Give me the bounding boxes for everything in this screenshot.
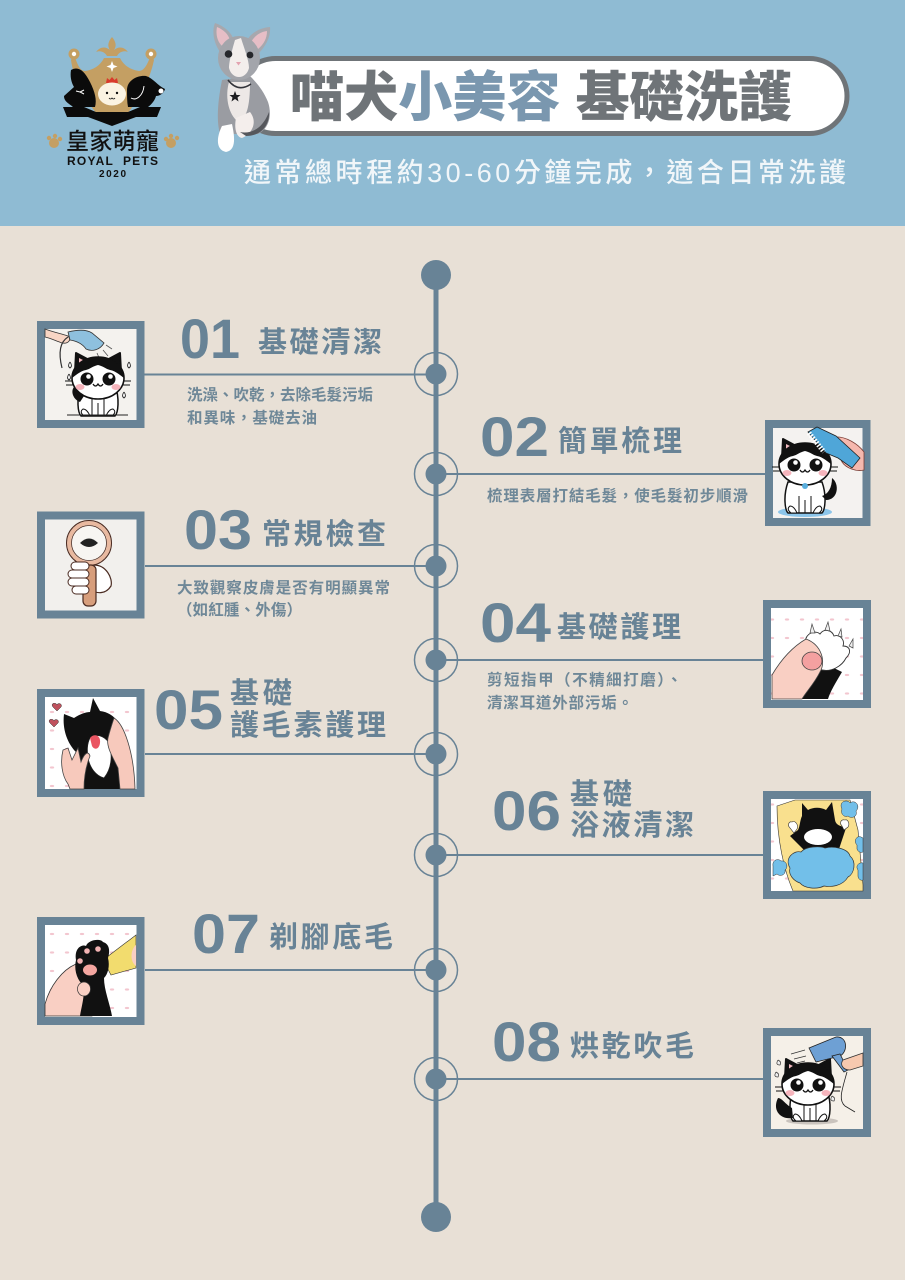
description 04 <box>487 670 682 712</box>
number 03: 03 <box>184 498 252 561</box>
heading 01: 基礎清潔 <box>258 326 382 359</box>
description 01: 洗澡、吹乾，去除毛髮污垢 <box>187 385 373 404</box>
icon: cat being showered <box>41 325 140 424</box>
heading 07: 剃腳底毛 <box>269 921 393 954</box>
connector 07 <box>145 969 436 971</box>
description 03: （如紅腫、外傷） <box>177 600 302 619</box>
number 02: 02 <box>480 405 549 468</box>
subtitle: 通常總時程約30-60分鐘完成，適合日常洗護 <box>244 158 846 188</box>
step 04 <box>414 591 867 712</box>
step 08 <box>414 1010 867 1133</box>
description 04: 清潔耳道外部污垢。 <box>487 693 633 712</box>
heading 04: 基礎護理 <box>557 611 681 644</box>
icon: paw with claws <box>767 604 867 704</box>
heading 03: 常規檢查 <box>262 518 386 551</box>
number 08: 08 <box>492 1010 561 1073</box>
number 06: 06 <box>492 779 561 842</box>
heading 05 <box>230 677 386 742</box>
icon: cat being blow dried <box>767 1032 867 1133</box>
description 03 <box>177 578 390 619</box>
node 06 <box>414 834 458 876</box>
node 07 <box>414 948 458 992</box>
heading 06 <box>570 778 694 842</box>
connector 06 <box>436 854 763 856</box>
heading 05: 護毛素護理 <box>230 709 386 742</box>
node 05 <box>414 732 458 776</box>
step 02 <box>414 405 866 522</box>
number 01: 01 <box>180 307 240 370</box>
number 05: 05 <box>154 678 223 741</box>
step 03 <box>41 498 458 619</box>
icon: cat in foam <box>767 795 867 895</box>
icon: paw pad trimming <box>41 921 140 1021</box>
icon: magnifying glass <box>41 516 140 614</box>
number 07: 07 <box>192 902 260 965</box>
number 04: 04 <box>480 591 551 654</box>
node 08 <box>414 1058 458 1100</box>
header band <box>0 0 905 226</box>
connector 02 <box>436 473 765 475</box>
step 07 <box>41 902 458 1021</box>
icon: cat being brushed <box>769 424 866 522</box>
step 05 <box>41 677 458 793</box>
kitten photo <box>213 23 270 152</box>
step 01 <box>41 307 458 427</box>
heading 02: 簡單梳理 <box>558 425 682 458</box>
logo: Royal Pets: 皇家萌寵 <box>66 128 159 154</box>
node 01 <box>414 352 458 396</box>
heading 05: 基礎 <box>230 677 292 710</box>
connector 08 <box>436 1078 763 1080</box>
description 01: 和異味，基礎去油 <box>187 408 317 427</box>
description 04: 剪短指甲（不精細打磨）、 <box>487 670 682 689</box>
node 04 <box>414 638 458 682</box>
description 02: 梳理表層打結毛髮，使毛髮初步順滑 <box>487 486 748 505</box>
connector 05 <box>145 753 436 755</box>
title: 喵犬小美容 基礎洗護 <box>290 68 792 128</box>
title pill <box>238 58 847 134</box>
logo: Royal Pets: 2020 <box>99 169 126 180</box>
logo: Royal Pets <box>47 37 179 180</box>
timeline <box>421 260 451 1232</box>
node 03 <box>414 544 458 588</box>
description 01 <box>187 385 373 427</box>
description 03: 大致觀察皮膚是否有明顯異常 <box>177 578 390 597</box>
connector 01 <box>144 374 436 376</box>
logo: Royal Pets: ROYAL PETS <box>67 154 158 168</box>
heading 08: 烘乾吹毛 <box>570 1030 694 1063</box>
connector 04 <box>436 659 763 661</box>
node 02 <box>414 452 458 496</box>
step 06 <box>414 778 867 895</box>
connector 03 <box>145 565 436 567</box>
heading 06: 浴液清潔 <box>570 809 694 842</box>
heading 06: 基礎 <box>570 778 632 811</box>
icon: black cat being massaged <box>41 693 140 793</box>
